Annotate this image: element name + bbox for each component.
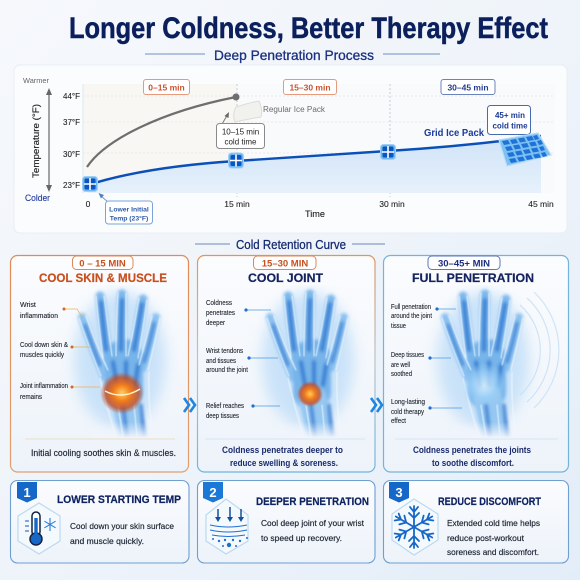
callout: 10-15 min cold time (216, 112, 264, 148)
y axis: 37°F (63, 117, 80, 127)
x axis: 30 min (379, 199, 405, 209)
callouts: Full penetration (391, 304, 431, 311)
x axis: 0 (86, 199, 91, 209)
y axis: 44°F (63, 91, 80, 101)
panel: 0-15 min cool skin and muscle (10, 256, 188, 472)
time range tags (144, 80, 495, 94)
number badge: 3 (395, 485, 403, 500)
x axis: 15 min (224, 199, 250, 209)
wrist illustration, joint warming (262, 292, 358, 440)
caption: Initial cooling soothes skin & muscles. (31, 448, 176, 459)
caption: Coldness penetrates deeper to (222, 445, 343, 456)
time pill (428, 256, 500, 270)
x axis: 45 min (528, 199, 554, 209)
card 3: reduce discomfort (384, 480, 568, 563)
panel: 15-30 min cool joint (198, 256, 375, 472)
body text: Cool down your skin surface (70, 521, 174, 531)
card 1: lower starting temp (10, 480, 189, 563)
callouts: Deep tissues (391, 352, 424, 359)
caption (413, 445, 531, 469)
icon: thermometer in hexagon (18, 503, 60, 554)
callouts: Wrist (20, 302, 36, 309)
y axis: Colder (25, 193, 50, 203)
callout: 45+ min cold time: cold time (492, 122, 528, 130)
body text: reduce post-workout (447, 533, 525, 543)
callouts: Relief reaches (206, 403, 244, 410)
caption (222, 445, 343, 469)
time pill (254, 256, 316, 270)
callouts: remains (20, 394, 42, 401)
number badge (203, 482, 223, 502)
regular ice pack curve (87, 94, 240, 167)
caption: Coldness penetrates the joints (413, 445, 531, 456)
heading: REDUCE DISCOMFORT (438, 496, 541, 508)
callouts: effect (391, 418, 406, 425)
number badge: 1 (23, 485, 31, 500)
caption: reduce swelling & soreness. (230, 458, 338, 469)
callouts: inflammation (20, 313, 58, 320)
body text (447, 518, 540, 557)
time range tags: 15–30 min (289, 82, 331, 92)
callout: lower initial temp: Lower Initial (109, 206, 149, 214)
body text (261, 518, 365, 543)
callouts (20, 302, 100, 401)
icon: penetration arrows in hexagon (206, 499, 248, 554)
body text (70, 521, 174, 546)
callout: 10-15 min cold time: 10–15 min (222, 128, 259, 136)
callouts: penetrates (206, 310, 235, 317)
callouts: tissue (391, 323, 406, 330)
time pill: 15–30 MIN (262, 258, 308, 270)
body text: to speed up recovery. (261, 533, 342, 543)
heading: COOL SKIN & MUSCLE (39, 271, 167, 285)
time range tags: 0–15 min (148, 82, 185, 92)
time pill: 30–45+ MIN (438, 258, 490, 270)
callouts: Long-lasting (391, 399, 425, 406)
y axis (23, 76, 80, 203)
callouts: Wrist tendons (206, 348, 243, 355)
icon: grid ice pack (499, 133, 551, 166)
callouts: deeper (206, 320, 226, 327)
body text: soreness and discomfort. (447, 547, 539, 557)
callouts: around the joint (391, 313, 432, 320)
icon: regular ice pack: Regular Ice Pack (263, 105, 326, 114)
callouts: Joint inflammation (20, 383, 68, 390)
grid ice pack curve (82, 136, 541, 193)
y axis: Temperature (°F) (31, 104, 42, 178)
time pill (72, 256, 133, 270)
panel: temperature chart (14, 65, 567, 233)
number badge (389, 482, 409, 502)
y axis: 30°F (63, 149, 80, 159)
callouts: deep tissues (206, 413, 239, 420)
callout: lower initial temp: Temp (23°F) (110, 214, 148, 222)
time range tags: 30–45 min (447, 82, 489, 92)
body text: Cool deep joint of your wrist (261, 518, 365, 528)
arrow: panel 1 to panel 2 (184, 398, 195, 412)
arrow: panel 2 to panel 3 (371, 398, 382, 412)
heading: COOL JOINT (248, 271, 324, 285)
x axis: Time (305, 209, 325, 219)
callouts (391, 304, 462, 425)
callouts: cold therapy (391, 409, 424, 416)
time pill: 0 – 15 MIN (79, 258, 126, 270)
callout: 10-15 min cold time: cold time (224, 138, 257, 146)
callouts: are well (391, 362, 410, 369)
callouts: Cool down skin & (20, 342, 68, 349)
number badge (17, 482, 37, 502)
callouts: muscles quickly (20, 352, 64, 359)
panel: 30-45 min full penetration (384, 256, 568, 472)
callout: 45+ min cold time (488, 106, 530, 134)
callouts: and tissues (206, 358, 236, 365)
heading: FULL PENETRATION (412, 271, 534, 285)
x axis (86, 199, 554, 219)
icon: regular ice pack (234, 101, 326, 122)
body text: Extended cold time helps (447, 518, 540, 528)
heading: LOWER STARTING TEMP (57, 494, 181, 506)
y axis: 23°F (63, 180, 80, 190)
callout: 45+ min cold time: 45+ min (495, 111, 525, 120)
callout: lower initial temp (98, 193, 152, 224)
subtitle: deep penetration process: Deep Penetration Process (214, 47, 374, 63)
icon: snowflake in hexagon (392, 499, 438, 555)
heading: DEEPER PENETRATION (256, 496, 369, 508)
callouts: around the joint (206, 367, 248, 374)
caption: to soothe discomfort. (432, 458, 514, 469)
number badge: 2 (209, 485, 217, 500)
label: grid ice pack: Grid Ice Pack (424, 128, 484, 139)
card 2: deeper penetration (198, 480, 375, 563)
callouts (206, 300, 280, 420)
callouts: Coldness (206, 300, 232, 307)
y axis: Warmer (23, 76, 49, 85)
section heading: cold retention curve: Cold Retention Curve (236, 238, 346, 252)
wrist illustration, fully cooled (437, 292, 559, 440)
body text: and muscle quickly. (70, 536, 144, 546)
wrist illustration, inflamed (74, 292, 170, 440)
callouts: soothed (391, 371, 412, 378)
